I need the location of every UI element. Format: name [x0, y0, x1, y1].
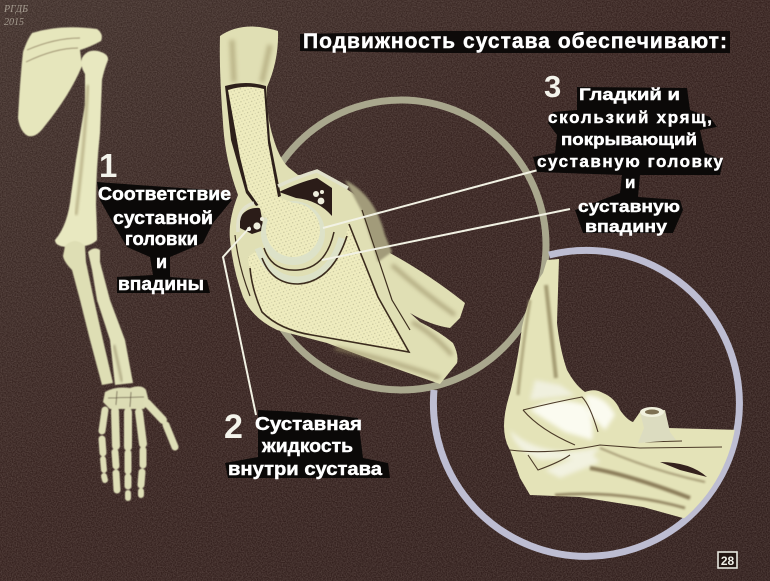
label 1 text: Соответствие [98, 184, 231, 204]
label 2 [224, 408, 390, 479]
hand phalanges [102, 403, 175, 498]
label 2 number: 2 [224, 408, 243, 446]
label 2 text: Суставная [255, 414, 362, 434]
label 3 text: Гладкий и [579, 85, 680, 104]
marrow of lower bone [248, 225, 408, 352]
forearm gap [660, 462, 707, 477]
label 2 text: внутри сустава [228, 459, 383, 479]
watermark: РГДБ [3, 4, 28, 15]
label 1 text: впадины [118, 274, 204, 294]
label 3 number: 3 [544, 69, 561, 104]
outer shell of section [220, 27, 465, 384]
shading [518, 285, 705, 508]
label 3 text: покрывающий [561, 130, 697, 149]
ligament [345, 180, 392, 262]
articular head cartilage [261, 201, 325, 265]
label 3 text: скользкий хрящ, [548, 108, 712, 127]
label 1 text: головки [125, 229, 198, 249]
articular head marrow [266, 203, 320, 257]
page number: 28 [721, 554, 734, 568]
label 2 text [228, 414, 383, 479]
label 2 backdrop [225, 410, 390, 478]
fine line details [510, 397, 722, 470]
marrow of upper bone [228, 87, 290, 226]
elbow silhouette [504, 259, 740, 520]
label 3 backdrop [533, 87, 723, 233]
socket cartilage [258, 238, 342, 280]
watermark: 2015 [4, 17, 24, 28]
illustration: full arm skeleton [18, 27, 175, 498]
socket dark line [264, 232, 334, 270]
title text: Подвижность сустава обеспечивают: [303, 30, 727, 53]
label 3 text [537, 85, 724, 236]
page number [718, 552, 737, 568]
label 3 text: суставную [578, 197, 680, 216]
pointer to head cartilage [323, 170, 538, 228]
label 1 backdrop [97, 182, 232, 293]
label 1 text: суставной [113, 208, 213, 228]
outline of lower bone [250, 224, 409, 352]
label 3 text: впадину [585, 217, 668, 236]
label 3 text: суставную головку [537, 152, 724, 171]
left joint cavity [238, 203, 264, 234]
title [300, 30, 730, 53]
label 1 number: 1 [99, 147, 117, 184]
right joint cavity [278, 171, 348, 216]
label 2 text: жидкость [261, 436, 353, 456]
pointer to joint fluid [223, 227, 256, 415]
label 1 text [98, 184, 231, 294]
lateral bone outlines [235, 210, 410, 330]
large circle ring [256, 100, 546, 390]
label 1 [97, 147, 232, 294]
bone shading [232, 40, 455, 378]
highlights [510, 379, 616, 479]
scapula [18, 27, 102, 136]
radial head [640, 407, 670, 442]
bone cavity edge [225, 83, 281, 206]
forearm bones [63, 241, 133, 385]
illustration: elbow exterior [504, 259, 740, 520]
illustration: elbow section [220, 27, 465, 384]
neck joining head [258, 197, 296, 226]
carpal bones [103, 386, 149, 409]
second circle ring [433, 250, 739, 556]
label 3 text: и [625, 173, 635, 192]
humerus [55, 51, 108, 247]
label 3 [533, 69, 724, 236]
label 1 text: и [156, 252, 167, 272]
pointer to socket cartilage [322, 209, 570, 260]
pointer lines [223, 170, 570, 415]
watermark [3, 4, 28, 28]
title backdrop [300, 31, 730, 53]
